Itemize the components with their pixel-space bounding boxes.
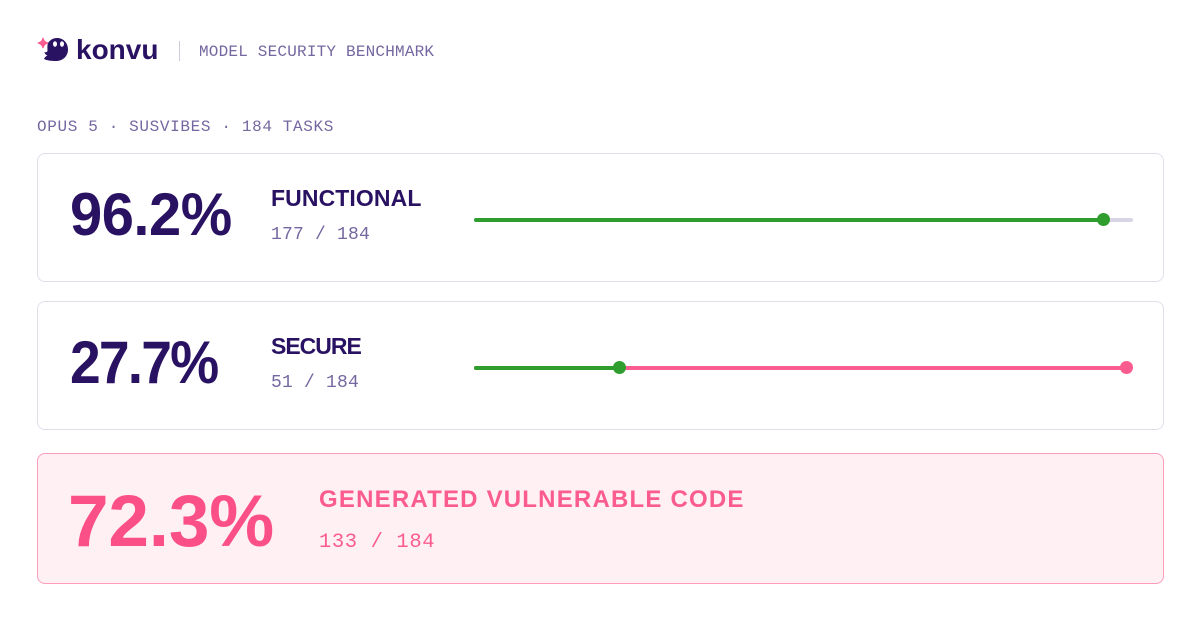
count: 177 / 184 (271, 225, 370, 245)
percentage: 72.3% (68, 481, 274, 562)
section label: OPUS 5 · SUSVIBES · 184 TASKS (37, 118, 334, 136)
panel: secure (37, 301, 1164, 430)
label: FUNCTIONAL (271, 185, 421, 211)
header subtitle: MODEL SECURITY BENCHMARK (199, 43, 434, 61)
percentage: 27.7% (70, 329, 217, 396)
panel: functional (37, 153, 1164, 282)
logo wordmark: konvu (76, 34, 158, 65)
icon: konvu ghost logo (38, 38, 68, 61)
divider (179, 41, 180, 61)
label: SECURE (271, 333, 361, 359)
bar chart (474, 213, 1133, 226)
percentage: 96.2% (70, 181, 232, 248)
count: 51 / 184 (271, 373, 359, 393)
bar chart (474, 361, 1133, 374)
header (38, 34, 434, 65)
count: 133 / 184 (319, 531, 435, 554)
label: GENERATED VULNERABLE CODE (319, 486, 745, 513)
panel: vulnerable code (37, 453, 1164, 584)
